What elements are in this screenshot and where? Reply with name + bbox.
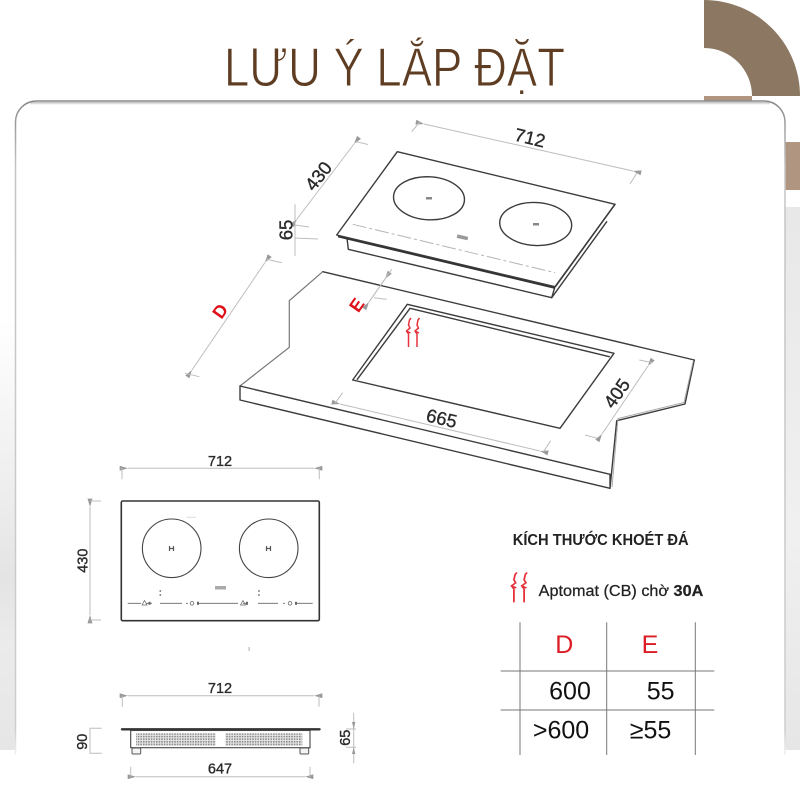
control strip [128, 586, 313, 605]
dimension 665 [335, 393, 551, 452]
dimension 430 [297, 142, 368, 219]
dimension 65 [338, 713, 356, 763]
dimension 712 [122, 454, 319, 479]
decorative quarter ring [704, 0, 800, 102]
dimension 647: 647 [208, 762, 232, 778]
icon: breaker wires in cutout [406, 318, 420, 347]
size table: D [555, 631, 573, 659]
breaker note: Aptomat (CB) chờ 30A [539, 583, 703, 600]
dimension E [345, 269, 392, 316]
background side strips [0, 142, 800, 750]
hob top plate [121, 501, 319, 621]
glass plate [122, 728, 320, 730]
feet [132, 748, 309, 754]
side view diagram [75, 681, 356, 778]
dimension D: D [208, 300, 232, 322]
size table: >600 [533, 716, 589, 744]
hob body with vents [131, 730, 310, 748]
dimension 65: 65 [338, 730, 354, 746]
hob outline [337, 152, 615, 298]
dimension 430: 430 [301, 157, 336, 195]
burners [142, 519, 298, 578]
dimension 647 [131, 762, 310, 778]
dimension 712: 712 [208, 681, 232, 697]
dimension 430 [75, 501, 101, 620]
dimension 712 [122, 681, 319, 707]
top view diagram [75, 454, 319, 651]
icon: breaker wires [512, 572, 527, 602]
dimension 665: 665 [424, 405, 459, 432]
dimension 65 [275, 204, 318, 256]
dimension D [185, 259, 282, 377]
dimension 65: 65 [275, 220, 296, 240]
dimension 712 [412, 122, 637, 184]
dimension 712: 712 [513, 124, 547, 151]
size table: E [642, 631, 658, 659]
size table: 600 [549, 678, 591, 706]
dimension 405: 405 [599, 375, 634, 412]
size table: 55 [647, 678, 675, 706]
countertop [240, 272, 694, 488]
isometric hob diagram [185, 122, 694, 488]
dimension 90: 90 [75, 734, 91, 750]
dimension 712: 712 [208, 454, 232, 470]
size table [501, 622, 714, 755]
hob burners [392, 175, 573, 247]
cutout dimensions legend [501, 531, 714, 755]
title: LƯU Ý LẮP ĐẶT [224, 36, 565, 98]
size table: ≥55 [630, 716, 671, 744]
dimension 90 [75, 728, 102, 753]
dimension 430: 430 [75, 549, 91, 573]
legend heading: KÍCH THƯỚC KHOÉT ĐÁ [513, 531, 689, 549]
cutout [353, 304, 614, 428]
dimension 405 [585, 360, 653, 438]
dimension E: E [345, 295, 369, 316]
hob control strip [353, 224, 555, 273]
